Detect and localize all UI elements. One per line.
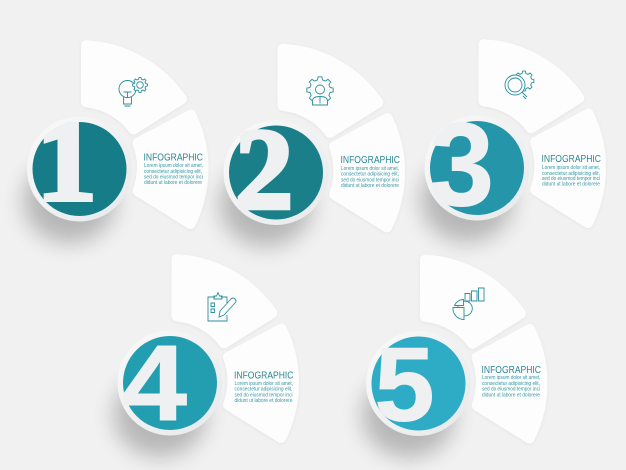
body 1: [144, 163, 203, 186]
top panel 4: [176, 259, 272, 343]
text panel 5: [476, 329, 542, 438]
body 1: sed do eiusmod tempor inci: [144, 174, 203, 180]
heading 3: INFOGRAPHIC: [542, 153, 601, 165]
body 4: didunt ut labore et dolorere: [234, 398, 293, 404]
body 3: didunt ut labore et dolorere: [542, 182, 600, 188]
text panel 4: [228, 328, 294, 438]
body 2: consectetur adipisicing elit,: [341, 172, 399, 178]
shadow 4: [114, 373, 206, 457]
text panel 3: [535, 114, 601, 223]
numeral 3: 3: [429, 99, 494, 231]
step 3: [421, 44, 601, 242]
numeral 1: 1: [36, 98, 97, 226]
body 3: Lorem ipsum dolor sit amet,: [542, 165, 600, 171]
body 3: [542, 165, 600, 188]
body 2: Lorem ipsum dolor sit amet,: [341, 166, 399, 172]
icon: person in gear: [307, 77, 333, 105]
body 2: [341, 166, 399, 189]
shadow 1: [24, 159, 116, 243]
disc 1: [32, 122, 126, 216]
numeral 5: 5: [374, 326, 435, 444]
step 4: [114, 259, 294, 457]
body 3: sed do eiusmod tempor inci: [542, 176, 600, 182]
body 5: [482, 375, 540, 398]
icon: magnifier and gear: [505, 71, 534, 99]
body 5: sed do eiusmod tempor inci: [482, 386, 540, 392]
ring 3: [424, 116, 530, 220]
icon: bulb and gear: [119, 78, 147, 106]
heading 4: INFOGRAPHIC: [234, 369, 294, 381]
disc 3: [430, 121, 524, 215]
numeral 2: 2: [235, 106, 293, 234]
body 4: sed do eiusmod tempor inci: [234, 392, 292, 398]
body 4: [234, 381, 293, 404]
shadow 2: [220, 162, 312, 246]
text panel 2: [334, 118, 400, 228]
disc 2: [229, 126, 323, 220]
ring 5: [366, 331, 471, 436]
ring 1: [27, 116, 132, 222]
step 1: [24, 45, 203, 243]
icon: bars and pie chart: [453, 288, 484, 320]
ring 2: [224, 120, 328, 225]
top panel 1: [86, 45, 182, 129]
body 1: didunt ut labore et dolorere: [144, 180, 202, 186]
step 5: [362, 260, 542, 458]
body 5: didunt ut labore et dolorere: [482, 392, 540, 398]
top panel 2: [282, 49, 378, 133]
body 4: consectetur adipisicing elit,: [234, 386, 292, 392]
ring 4: [118, 330, 222, 436]
body 4: Lorem ipsum dolor sit amet,: [234, 381, 293, 387]
body 2: didunt ut labore et dolorere: [341, 183, 399, 189]
body 1: Lorem ipsum dolor sit amet,: [144, 163, 203, 169]
heading 2: INFOGRAPHIC: [340, 154, 400, 166]
shadow 5: [362, 374, 454, 458]
body 5: consectetur adipisicing elit,: [482, 381, 540, 387]
body 3: consectetur adipisicing elit,: [542, 171, 600, 177]
shadow 3: [421, 158, 513, 242]
text panel 1: [138, 114, 203, 224]
body 5: Lorem ipsum dolor sit amet,: [482, 375, 540, 381]
disc 4: [123, 336, 217, 430]
heading 1: INFOGRAPHIC: [144, 152, 203, 164]
top panel 3: [484, 44, 579, 128]
body 2: sed do eiusmod tempor inci: [341, 178, 399, 184]
icon: clipboard and pencil: [208, 292, 236, 321]
body 1: consectetur adipisicing elit,: [144, 169, 202, 175]
numeral 4: 4: [122, 322, 187, 443]
heading 5: INFOGRAPHIC: [482, 364, 541, 376]
step 2: [220, 49, 400, 246]
top panel 5: [425, 260, 521, 344]
disc 5: [372, 336, 466, 430]
